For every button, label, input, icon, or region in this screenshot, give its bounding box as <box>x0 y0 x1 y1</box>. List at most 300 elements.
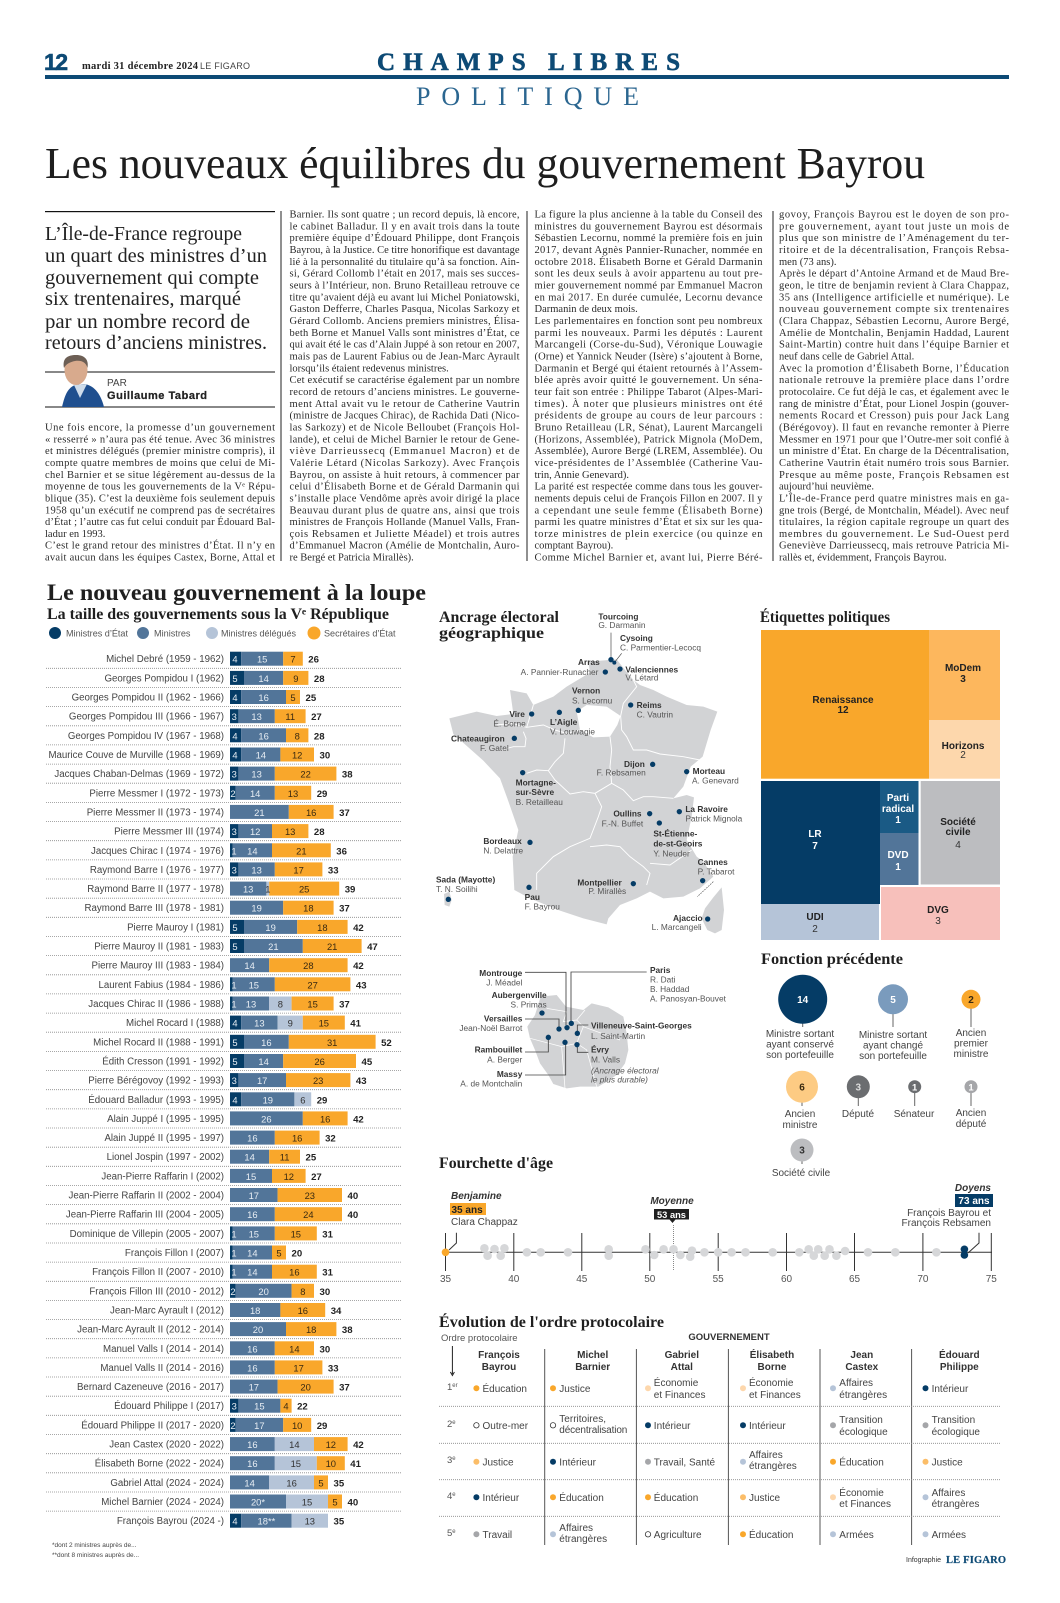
row: Bernard Cazeneuve: 37 <box>339 1383 350 1394</box>
column headers: Élisabeth <box>750 1348 794 1361</box>
row: Jacques Chirac II: 1 <box>231 998 237 1010</box>
map labels: Chateaugiron <box>451 734 505 744</box>
article column 2: d’Emmanuel Macron (Amélie de Montchalin, Auro- <box>290 541 520 552</box>
bubble: 6: ministre <box>782 1120 818 1131</box>
row: Dominique de Villepin: 15 <box>249 1228 259 1239</box>
bubble: 3 <box>772 1138 831 1179</box>
article column 4: Amélie de Montchalin, Benjamin Haddad, Laurent <box>779 328 1009 339</box>
intro standfirst: retours d’anciens ministres. <box>45 332 267 354</box>
article column 4: membres du gouvernement. Le Sud-Ouest perd <box>779 529 1010 540</box>
row: Michel Barnier <box>46 1494 402 1511</box>
callout: average: 53 ans <box>657 1210 686 1220</box>
column: Jean Castex: Transition <box>839 1415 883 1426</box>
column: Michel Barnier <box>550 1384 627 1545</box>
map labels: La Ravoire <box>685 804 728 814</box>
bubble: 14 <box>766 975 834 1061</box>
row: Jacques Chirac II: Jacques Chirac II (1986 - 1988) <box>88 999 224 1010</box>
row: Raymond Barre III: 37 <box>339 904 350 915</box>
row: Manuel Valls I: 16 <box>247 1343 258 1354</box>
map shape: France <box>449 659 717 924</box>
row: Georges Pompidou IV: 28 <box>314 731 325 742</box>
bubble: 6 <box>782 1071 818 1131</box>
row: Jean Castex <box>46 1437 402 1454</box>
row: Jean-Marc Ayrault I: Jean-Marc Ayrault I (2012) <box>110 1306 224 1316</box>
article column 2: lande), et celui de Michel Barnier le retour de Gene- <box>290 434 520 445</box>
article column 3: présidents de groupe au cours de leur parcours : <box>534 411 763 422</box>
tile: MoDem <box>929 630 1000 720</box>
tile: Renaissance: 12 <box>837 705 849 716</box>
header rule <box>45 75 1009 79</box>
page header: LE FIGARO <box>200 61 250 71</box>
tile: Horizons: Horizons <box>942 741 985 752</box>
article column 3: 2017, devant Agnès Pannier-Runacher, nommée en <box>534 245 763 256</box>
map labels: M. Valls <box>591 1055 620 1065</box>
map labels: de-st-Geoirs <box>653 839 703 849</box>
article column 2: première équipe d’Édouard Philippe, dont François <box>290 232 520 244</box>
bubble: 2 <box>953 990 989 1060</box>
footnotes: **dont 8 ministres auprès de... <box>52 1552 139 1559</box>
map labels: F.-N. Buffet <box>602 819 644 829</box>
article column 2: mais pas de Laurent Fabius ou de Jean-Marc Ayrault <box>290 352 520 362</box>
article column 4: protocolaire. Ce fut déjà le cas, et également avec le <box>779 387 1009 398</box>
column: François Bayrou: Outre-mer <box>482 1421 529 1432</box>
column headers: Gabriel <box>665 1350 699 1361</box>
chart heading: La taille des gouvernements sous la Vᵉ République <box>47 606 389 623</box>
column: Jean Castex: et Finances <box>839 1499 891 1510</box>
row: Jean Castex: 42 <box>353 1440 364 1451</box>
article column 2: record de retours d’anciens ministres. Le gouverne- <box>290 387 520 398</box>
map labels: Oullins <box>613 809 642 819</box>
map labels: Patrick Mignola <box>685 814 743 824</box>
section name: CHAMPS LIBRES <box>377 49 680 76</box>
row: Pierre Messmer I: 13 <box>288 788 298 799</box>
row: Bernard Cazeneuve <box>46 1380 402 1396</box>
map labels <box>436 611 743 932</box>
row: Michel Debré: 4 <box>232 654 238 665</box>
row: Pierre Mauroy I: 19 <box>265 922 276 933</box>
row: Pierre Mauroy I: 42 <box>353 923 364 934</box>
row: Raymond Barre I: 33 <box>328 865 339 876</box>
callout: average: Moyenne <box>650 1196 694 1207</box>
row: Édouard Philippe I: 22 <box>297 1402 308 1413</box>
article column 4: rallès et, évidemment, François Bayrou. <box>779 553 947 564</box>
bubble: 5 <box>859 984 927 1062</box>
map labels: V. Louwagie <box>550 727 595 737</box>
article column 4: nationale retrouve la première place dans l’ordre <box>779 375 1009 386</box>
map labels: Valenciennes <box>625 664 678 674</box>
axis caption: Ordre protocolaire <box>441 1333 518 1344</box>
article column 3: (Orne) et Yannick Neuder (Isère) s’ajoutent à Borne, <box>534 352 762 362</box>
article column 4: Après le départ d’Antoine Armand et de Maud Bre- <box>779 269 1010 280</box>
row: Élisabeth Borne: 15 <box>291 1458 301 1469</box>
article column 3: sont les deux seuls à avoir appartenu au tout pre- <box>534 269 763 280</box>
row: Édith Cresson: 14 <box>258 1056 269 1067</box>
rank labels: 4 <box>447 1491 452 1502</box>
rank labels: 5 <box>447 1528 452 1539</box>
tile: DVG <box>881 887 1000 940</box>
row: Georges Pompidou III: 13 <box>251 711 262 722</box>
article column 4: Avec la promotion d’Élisabeth Borne, l’Éducation <box>779 362 1010 374</box>
age dots <box>480 1244 941 1261</box>
article column 2: ment Attal avait vu le retour de Catherine Vautrin <box>290 399 520 410</box>
row: Pierre Messmer III <box>46 824 402 841</box>
article column 2: lié à la personnalité du titulaire qu’à sa fonction. Ain- <box>290 257 520 268</box>
row: Raymond Barre III: Raymond Barre III (1978 - 1981) <box>85 903 224 914</box>
article column 4: neuf dans celle de Gabriel Attal. <box>779 352 914 362</box>
article column 3: comptant Bayrou). <box>534 541 613 552</box>
tile: Renaissance <box>761 630 929 779</box>
row: Jean-Pierre Raffarin II: 23 <box>305 1190 315 1201</box>
article column 1: d’État ; l’autre cas fut celui conduit par Édouard Bal- <box>45 516 276 528</box>
column headers: Borne <box>758 1362 787 1373</box>
row: Jacques Chirac II: 37 <box>339 1000 350 1010</box>
row: Laurent Fabius: 1 <box>231 979 237 990</box>
infographic credit <box>906 1555 1006 1566</box>
callout: youngest: 35 ans <box>452 1205 483 1216</box>
row: Michel Rocard II: 16 <box>261 1037 272 1048</box>
map labels: Y. Neuder <box>653 849 690 859</box>
article column 2: Gérard Collomb. Anciens premiers ministres, Élisa- <box>290 315 520 327</box>
article column 3: La figure la plus ancienne à la table du Conseil des <box>534 210 762 220</box>
row: François Fillon I: 5 <box>276 1248 282 1258</box>
article column 3: octobre 2018. Élisabeth Borne et Gérald Darmanin <box>534 256 763 268</box>
bubble: 2: premier <box>954 1038 989 1050</box>
map heading: géographique <box>439 625 544 642</box>
row: Pierre Messmer I: 29 <box>317 789 327 800</box>
axis labels <box>440 1274 997 1285</box>
article column 4: nements Rocard et Cresson) puis pour Jack Lang <box>779 411 1010 422</box>
row: Lionel Jospin: 14 <box>244 1152 255 1163</box>
row: Michel Barnier: 40 <box>348 1498 358 1508</box>
article column 1: « resserré » n’aura pas été tenue. Avec 36 ministres <box>45 434 275 445</box>
row: Alain Juppé I: 26 <box>261 1113 272 1124</box>
bubbles: previous function <box>766 975 989 1179</box>
row: Jacques Chirac I: Jacques Chirac I (1974 - 1976) <box>91 846 224 857</box>
map labels: F. Gatel <box>480 743 509 753</box>
row: Michel Barnier: 20* <box>251 1496 265 1508</box>
column: Élisabeth Borne: étrangères <box>749 1461 797 1472</box>
row: Manuel Valls I <box>46 1341 402 1358</box>
map labels: Versailles <box>484 1014 523 1024</box>
row: Georges Pompidou IV: 8 <box>295 730 300 741</box>
arrow: rank direction <box>450 1346 454 1376</box>
footnotes: *dont 2 ministres auprès de... <box>52 1542 137 1549</box>
row: François Fillon I: 1 <box>231 1248 237 1258</box>
row: Raymond Barre III: 19 <box>251 903 262 914</box>
row: Gabriel Attal: 16 <box>286 1477 297 1488</box>
tile: UDI: UDI <box>806 912 824 923</box>
row: Édouard Philippe I: 4 <box>283 1401 289 1412</box>
row: Pierre Messmer II: 16 <box>306 807 316 818</box>
article column 2: qui avait été le cas d’Alain Juppé à son retour en 2007, <box>290 340 520 351</box>
row: Raymond Barre II: Raymond Barre II (1977 - 1978) <box>87 884 224 895</box>
row: François Fillon II: 1 <box>231 1267 237 1278</box>
article column 2: s’installe place Vendôme après avoir dirigé la place <box>290 493 520 504</box>
row: Jacques Chaban-Delmas: 3 <box>232 769 237 780</box>
article column 4: pre gouvernement, ayant tout juste un mois de <box>779 221 1009 232</box>
map labels: sur-Sèvre <box>516 787 554 797</box>
row: François Fillon I <box>46 1246 402 1262</box>
infographic credit: LE FIGARO <box>946 1555 1006 1566</box>
row: Georges Pompidou I: Georges Pompidou I (1962) <box>104 673 224 684</box>
map labels: Cannes <box>698 857 728 867</box>
row: Dominique de Villepin: 15 <box>291 1228 301 1239</box>
intro standfirst: gouvernement qui compte <box>45 267 259 289</box>
column headers: Castex <box>845 1362 879 1373</box>
bubble: 5: Ministre sortant <box>859 1030 927 1041</box>
row: Raymond Barre I: 17 <box>293 864 304 875</box>
article column 2: celui d’Élisabeth Borne et de Gérald Darmanin qui <box>290 481 520 493</box>
row: François Fillon II <box>46 1265 402 1281</box>
article column 3: Sébastien Lecornu, nommé la première fois en juin <box>534 233 763 244</box>
column headers: Bayrou <box>482 1362 516 1373</box>
map labels: P. Tabarot <box>698 867 735 877</box>
row: Pierre Mauroy I: 18 <box>317 922 328 933</box>
row: Bernard Cazeneuve: Bernard Cazeneuve (2016 - 2017) <box>77 1382 224 1393</box>
row: Michel Rocard II <box>46 1035 402 1051</box>
row: Pierre Messmer III: Pierre Messmer III (1974) <box>114 827 224 838</box>
row: Édouard Philippe II: 10 <box>292 1420 302 1431</box>
column: Michel Barnier: décentralisation <box>559 1425 627 1436</box>
row: Édith Cresson <box>46 1054 402 1071</box>
column: Michel Barnier: Justice <box>559 1384 591 1395</box>
row: Élisabeth Borne <box>46 1456 402 1473</box>
row: Jean-Pierre Raffarin I: 15 <box>246 1171 256 1182</box>
article column 4: men (73 ans). <box>779 257 836 268</box>
row: Pierre Messmer I <box>46 786 402 802</box>
article column 1: Une fois encore, la promesse d’un gouvernement <box>45 422 275 433</box>
row: Michel Rocard I: 4 <box>232 1018 238 1029</box>
row: Pierre Bérégovoy: Pierre Bérégovoy (1992 - 1993) <box>88 1076 224 1087</box>
row: Jacques Chirac II <box>46 996 402 1013</box>
row: Pierre Messmer I: 14 <box>250 788 260 799</box>
row: Jean Castex: 12 <box>326 1439 336 1450</box>
row: François Fillon II: 31 <box>322 1268 334 1279</box>
column headers: Attal <box>671 1362 693 1373</box>
column: Jean Castex: Affaires <box>839 1378 873 1389</box>
axis labels: 40 <box>508 1274 520 1285</box>
row: Georges Pompidou III: Georges Pompidou III (1966 - 1967) <box>69 712 224 723</box>
row: Alain Juppé II <box>46 1131 402 1147</box>
map labels <box>459 965 727 1089</box>
article column 3: Assemblée), Aurore Bergé (LREM, Assemblée). Ou <box>534 446 763 457</box>
row: Jean-Pierre Raffarin III: 16 <box>247 1209 258 1220</box>
article column 2: Cet exécutif se caractérise également par un nombre <box>290 375 520 386</box>
callout: oldest: François Bayrou et <box>907 1208 991 1219</box>
axis labels: 75 <box>986 1274 997 1285</box>
axis labels: 35 <box>440 1274 451 1285</box>
map labels: A. Pannier-Runacher <box>521 667 599 677</box>
map labels: F. Bayrou <box>525 902 560 912</box>
column: Michel Barnier: étrangères <box>559 1534 607 1545</box>
row: Gabriel Attal <box>46 1475 402 1492</box>
row: Dominique de Villepin: 31 <box>322 1229 334 1240</box>
row: Georges Pompidou IV: 16 <box>258 730 269 741</box>
row: Dominique de Villepin: 1 <box>231 1228 237 1239</box>
column: Michel Barnier: Territoires, <box>559 1414 606 1425</box>
article column 3: torze ministres de plein exercice (ou quinze en <box>534 529 763 540</box>
row: Pierre Bérégovoy: 43 <box>356 1076 367 1087</box>
row: Michel Rocard II: Michel Rocard II (1988 - 1991) <box>93 1037 224 1048</box>
map labels: P. Mirallès <box>588 886 626 896</box>
row: François Bayrou <box>117 1514 345 1528</box>
row: Jean-Pierre Raffarin I: 12 <box>284 1171 294 1182</box>
map labels: Dijon <box>624 759 645 769</box>
column: Jean Castex: écologique <box>839 1427 888 1438</box>
author byline: Guillaume Tabard <box>107 390 207 402</box>
map labels: Jean-Noël Barrot <box>459 1023 523 1033</box>
column caption: GOUVERNEMENT <box>688 1332 770 1343</box>
row: Laurent Fabius: 27 <box>307 979 318 990</box>
map labels: S. Lecornu <box>572 696 613 706</box>
map labels: le plus durable) <box>591 1074 648 1084</box>
map labels: L. Marcangeli <box>652 922 702 932</box>
row: Raymond Barre III <box>46 901 402 917</box>
column headers: Michel <box>577 1350 608 1361</box>
article column 3: Marcangeli (Corse-du-Sud), Véronique Louwagie <box>534 340 763 351</box>
infographic credit: Infographie <box>906 1557 941 1564</box>
tile: UDI <box>761 904 879 940</box>
row: Alain Juppé I: 16 <box>320 1113 330 1124</box>
article column 2: beth Borne et Manuel Valls sont ministres d’État, ce <box>290 327 520 339</box>
row: Pierre Messmer III: 13 <box>285 826 295 837</box>
tile: Parti radical: 1 <box>895 815 901 826</box>
row: Georges Pompidou II: 5 <box>290 692 296 703</box>
article column 4: Messmer en 1971 pour que l’Outre-mer soit confié à <box>779 434 1009 445</box>
map labels: Vire <box>509 709 525 719</box>
article column 3: nements depuis celui de François Fillon en 2007. Il y <box>534 493 763 504</box>
column headers: Jean <box>850 1350 873 1361</box>
column: François Bayrou: Justice <box>482 1457 514 1468</box>
map labels: Bordeaux <box>483 836 522 846</box>
tile: DVD <box>880 833 918 885</box>
row: Michel Rocard II: 52 <box>381 1038 392 1049</box>
protocol order table <box>439 1332 1000 1545</box>
article column 2: le cabinet Balladur. Il y en avait trois dans la toute <box>290 221 520 232</box>
tile: Parti radical <box>880 781 918 833</box>
intro standfirst: six trentenaires, marqué <box>45 288 241 310</box>
column: Édouard Philippe: étrangères <box>932 1499 979 1510</box>
tile: Renaissance: Renaissance <box>812 695 874 706</box>
column: François Bayrou: Éducation <box>482 1382 527 1395</box>
row: Élisabeth Borne: Élisabeth Borne (2022 - 2024) <box>95 1459 224 1470</box>
row: Raymond Barre II: 39 <box>345 885 355 896</box>
row: Georges Pompidou II: Georges Pompidou II (1962 - 1966) <box>72 692 224 704</box>
map labels: Villeneuve-Saint-Georges <box>591 1021 692 1031</box>
row: Pierre Bérégovoy: 17 <box>257 1075 267 1086</box>
column: Michel Barnier: Intérieur <box>559 1457 597 1468</box>
chart legend: Ministres d’État <box>66 628 128 638</box>
row: Bernard Cazeneuve: 17 <box>249 1382 259 1393</box>
row: Maurice Couve de Murville: 12 <box>292 750 302 760</box>
row: François Bayrou: 13 <box>305 1516 315 1527</box>
article column 3: Darmanin de deux mois. <box>534 304 638 315</box>
row: Pierre Mauroy III: Pierre Mauroy III (1983 - 1984) <box>92 961 224 972</box>
row: Georges Pompidou I: 28 <box>314 674 325 685</box>
article column 2: Beauvau durant plus de quatre ans, ainsi que trois <box>290 505 520 516</box>
column headers <box>478 1348 980 1373</box>
bubble: 1 <box>894 1080 935 1120</box>
article column 3: blée après avoir quitté le gouvernement. Un séna- <box>534 375 763 386</box>
row: François Bayrou: François Bayrou (2024 -) <box>117 1516 224 1527</box>
main title: Les nouveaux équilibres du gouvernement Bayrou <box>45 139 925 188</box>
protocol order heading: Évolution de l'ordre protocolaire <box>439 1312 664 1331</box>
row: François Fillon II: François Fillon II (2007 - 2010) <box>92 1267 224 1278</box>
tile: DVG: DVG <box>927 905 949 916</box>
column: Élisabeth Borne: Éducation <box>749 1528 793 1541</box>
row: Jean-Pierre Raffarin I <box>46 1169 402 1186</box>
map labels: R. Dati <box>650 975 676 985</box>
article column 2: titre qu’avaient déjà eu avant lui Michel Poniatowski, <box>290 292 520 303</box>
row: Raymond Barre I: 3 <box>232 864 237 875</box>
article column 3: parmi les quatre ministres d’État et six sur les qua- <box>534 516 763 528</box>
tile: Société civile: civile <box>945 827 971 838</box>
row: Manuel Valls II: 17 <box>293 1362 304 1373</box>
article column 1: compte quatre membres de moins que celui de Mi- <box>45 458 276 469</box>
row: Gabriel Attal: Gabriel Attal (2024 - 2024) <box>110 1478 224 1489</box>
map labels: St-Étienne- <box>653 829 698 839</box>
map labels: V. Létard <box>625 673 659 683</box>
row: Édouard Balladur: Édouard Balladur (1993 - 1995) <box>88 1095 224 1106</box>
map labels: Tourcoing <box>598 611 638 621</box>
row: Édouard Philippe II <box>46 1418 402 1434</box>
row: Jean-Pierre Raffarin I: 27 <box>311 1172 322 1183</box>
column: Jean Castex <box>830 1378 891 1541</box>
row: Alain Juppé II: 16 <box>247 1133 258 1144</box>
column: Édouard Philippe: Armées <box>932 1530 966 1541</box>
row: Georges Pompidou II: 16 <box>258 692 269 703</box>
article column 4: Saint-Martin) contre huit dans l’équipe Barnier et <box>779 340 1009 351</box>
map labels: A. Panosyan-Bouvet <box>650 993 727 1003</box>
column: Gabriel Attal: et Finances <box>654 1390 706 1401</box>
axis labels: 50 <box>644 1274 656 1285</box>
map labels: Mortagne- <box>516 777 556 787</box>
bubble: 3: 3 <box>799 1146 805 1156</box>
row: Jean-Pierre Raffarin II: 17 <box>249 1190 259 1201</box>
map labels: F. Rebsamen <box>597 768 646 778</box>
tile: Société civile: Société <box>940 817 976 828</box>
row: Alain Juppé I: Alain Juppé I (1995 - 1995) <box>107 1114 224 1125</box>
column: Jean Castex: étrangères <box>839 1390 887 1401</box>
map labels: A. Genevard <box>692 775 739 785</box>
row: Jean-Pierre Raffarin III: 24 <box>303 1209 314 1220</box>
row: Michel Rocard I: 13 <box>254 1018 265 1029</box>
column: Michel Barnier: Éducation <box>559 1491 604 1504</box>
row: Jacques Chirac I: 21 <box>296 845 307 856</box>
column: Édouard Philippe: Affaires <box>932 1488 965 1499</box>
intro standfirst: un quart des ministres d’un <box>45 245 267 267</box>
map labels: C. Parmentier-Lecocq <box>620 643 701 653</box>
bubble: 1: Sénateur <box>894 1109 935 1120</box>
column: Élisabeth Borne: Affaires <box>749 1450 783 1461</box>
row: Michel Rocard I: 15 <box>319 1018 329 1029</box>
rank labels: er <box>452 1383 458 1389</box>
row: Édith Cresson: 26 <box>314 1056 325 1067</box>
tile: LR <box>761 781 880 904</box>
row: Jacques Chaban-Delmas: 22 <box>300 769 311 780</box>
article column 3: Darmanin et Bergé qui étaient retournés à l’Assem- <box>534 363 763 374</box>
column: Gabriel Attal: Agriculture <box>654 1530 702 1541</box>
row: Georges Pompidou I: 5 <box>232 673 238 684</box>
article column 4: rang de ministre d’État, pour Lionel Jospin (gouver- <box>779 398 1010 410</box>
row: Jean-Pierre Raffarin III: Jean-Pierre Raffarin III (2004 - 2005) <box>66 1210 224 1221</box>
row: Georges Pompidou I <box>46 671 402 688</box>
row: Alain Juppé I <box>46 1111 402 1128</box>
article column 1: chel Barnier et se situe légèrement au-dessus de la <box>45 470 275 481</box>
article column 1: blique (35). C’est la deuxième fois seulement depuis <box>45 493 275 504</box>
column: Gabriel Attal: Travail, Santé <box>654 1457 716 1468</box>
row: Pierre Mauroy II: Pierre Mauroy II (1981 - 1983) <box>94 942 224 952</box>
